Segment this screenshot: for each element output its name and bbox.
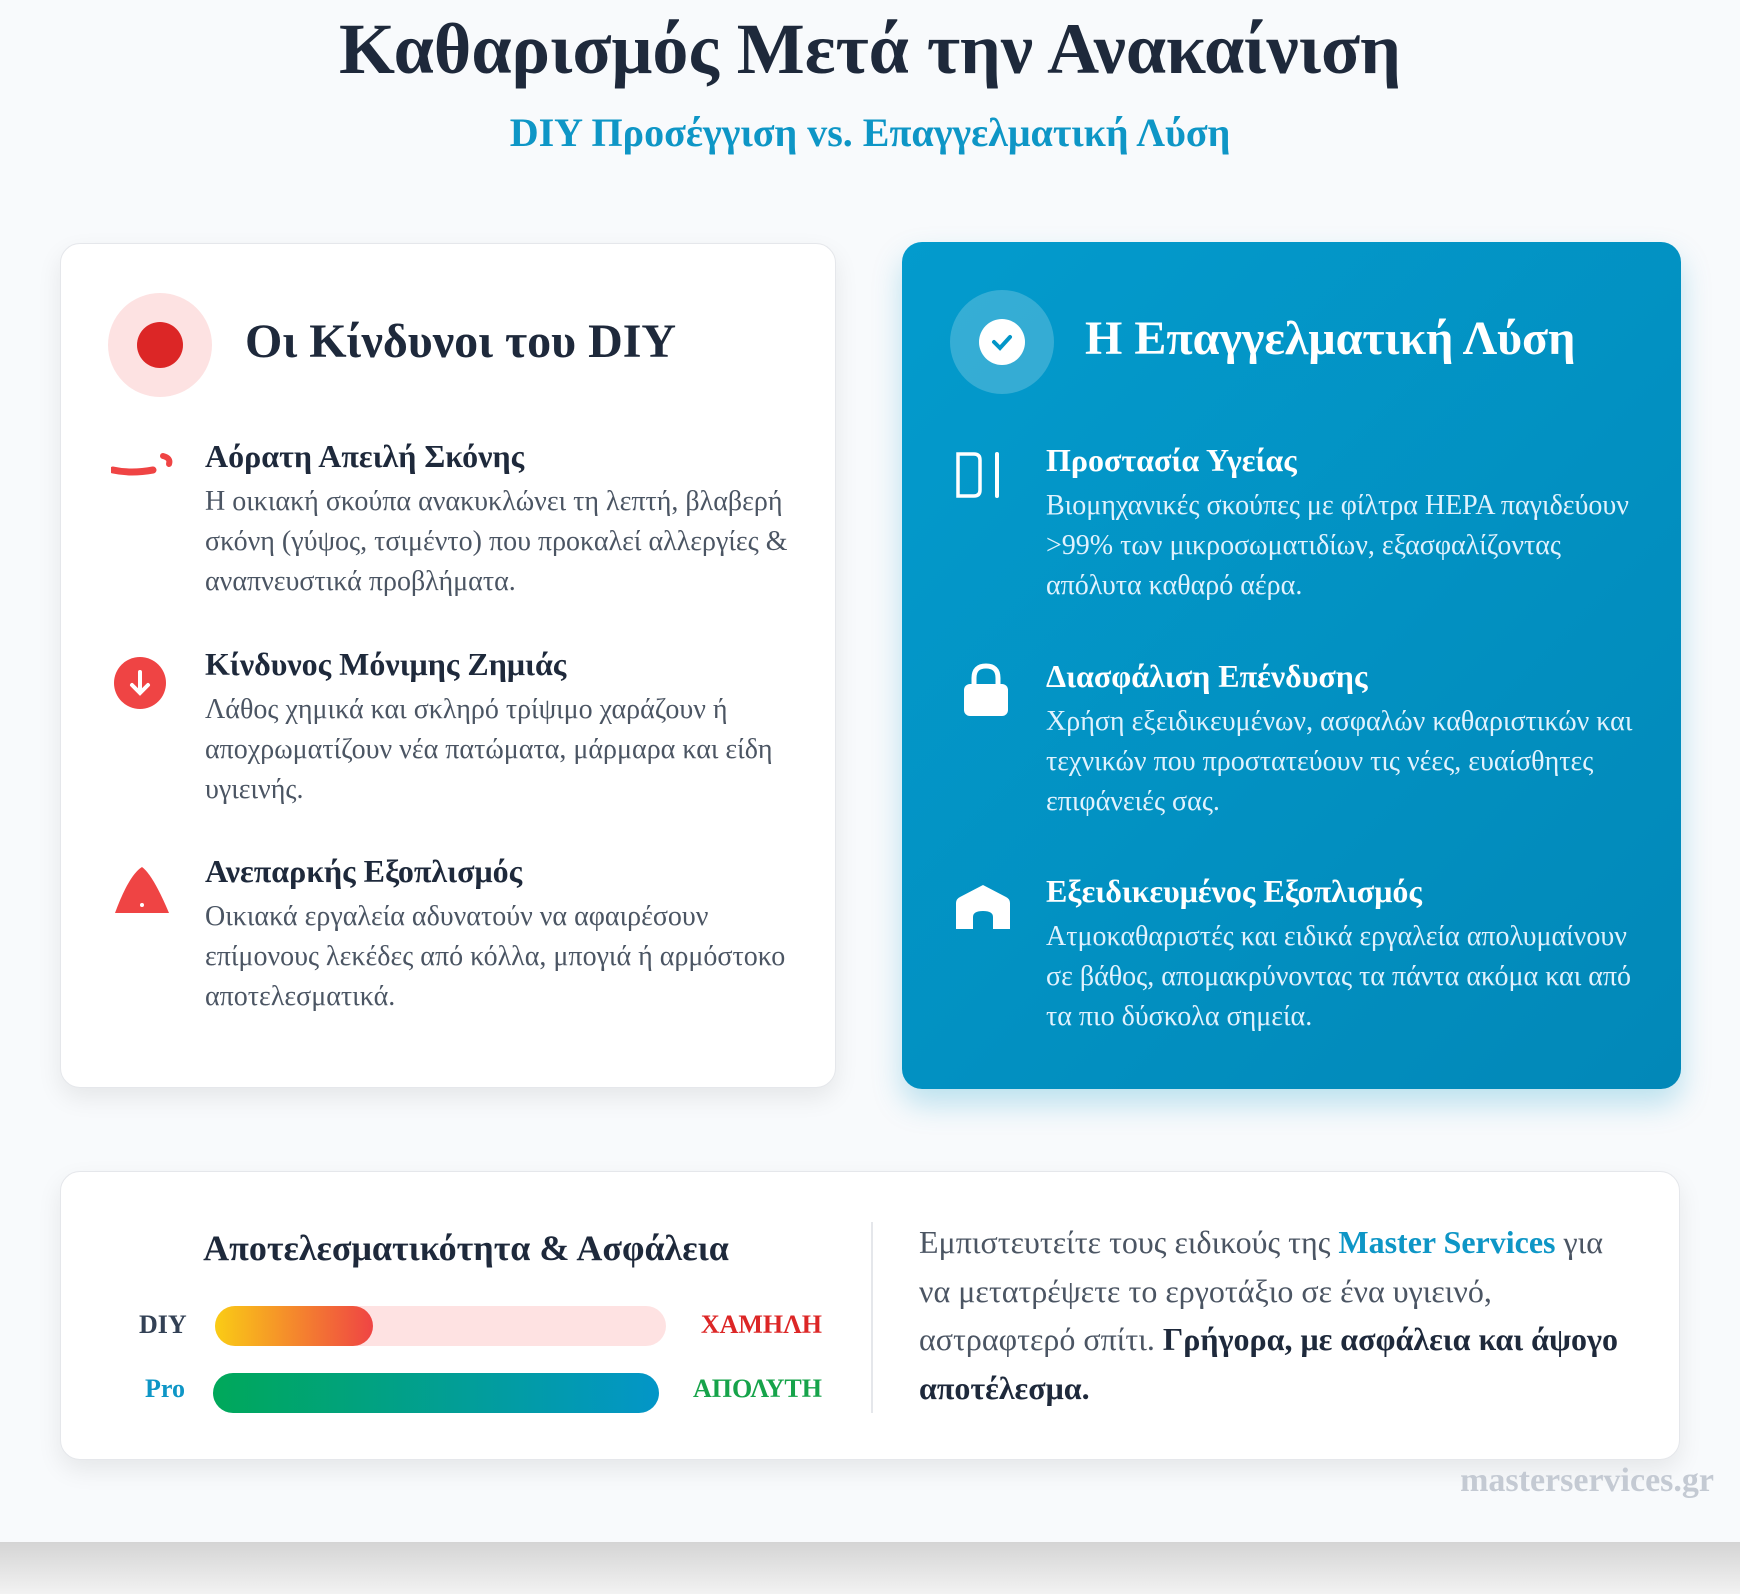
item: equipment	[115, 853, 785, 1012]
panel: DIY risks: Οικιακά εργαλεία αδυνατούν να αφαιρέσουν επίμονους λεκέδες από κόλλα, μπογιά ή αρμόστοκο αποτελεσματικά.	[205, 901, 785, 1012]
watermark: masterservices.gr	[1460, 1462, 1714, 1499]
heading: DIY risks: Οι Κίνδυνοι του DIY	[245, 315, 676, 368]
bar chart	[139, 1306, 822, 1413]
heading: pro solution: Η Επαγγελματική Λύση	[1085, 312, 1575, 365]
subtitle: DIY Προσέγγιση vs. Επαγγελματική Λύση	[510, 110, 1230, 155]
bar chart: DIY	[139, 1310, 187, 1339]
panel: DIY risks: Η οικιακή σκούπα ανακυκλώνει τη λεπτή, βλαβερή σκόνη (γύψος, τσιμέντο) που προκαλεί αλλεργίες & αναπνευστικά προβλήματα.	[205, 486, 788, 597]
icon: red dot circle	[108, 293, 212, 397]
item: damage	[114, 646, 773, 805]
icon: dust	[111, 453, 172, 476]
panel: DIY risks: Λάθος χημικά και σκληρό τρίψιμο χαράζουν ή αποχρωματίζουν νέα πατώματα, μάρμαρα και είδη υγιεινής.	[205, 694, 773, 805]
bar chart: ΧΑΜΗΛΗ	[701, 1310, 822, 1339]
icon: house	[956, 885, 1010, 929]
item: equipment	[956, 873, 1631, 1032]
icon: check circle	[950, 290, 1054, 394]
panel: professional solution: Ατμοκαθαριστές και ειδικά εργαλεία απολυμαίνουν σε βάθος, απομακρύνοντας τα πάντα ακόμα και από τα πιο δύσκολα σημεία.	[1046, 921, 1631, 1032]
title: Καθαρισμός Μετά την Ανακαίνιση	[339, 9, 1401, 89]
panel: professional solution: Χρήση εξειδικευμένων, ασφαλών καθαριστικών και τεχνικών που προστατεύουν τις νέες, ευαίσθητες επιφάνειές σας.	[1046, 706, 1632, 817]
panel: professional solution: Βιομηχανικές σκούπες με φίλτρα HEPA παγιδεύουν >99% των μικροσωματιδίων, εξασφαλίζοντας απόλυτα καθαρό αέρα.	[1046, 490, 1629, 601]
heading: effectiveness: Αποτελεσματικότητα & Ασφάλεια	[203, 1228, 729, 1268]
icon: lock	[964, 664, 1008, 716]
icon: filter	[956, 452, 999, 498]
panel: DIY risks: Κίνδυνος Μόνιμης Ζημιάς	[205, 646, 566, 682]
panel: professional solution: Εξειδικευμένος Εξοπλισμός	[1046, 873, 1422, 909]
bar chart: ΑΠΟΛΥΤΗ	[693, 1374, 822, 1403]
panel: professional solution	[902, 242, 1681, 1089]
item: dust	[111, 438, 788, 597]
panel: DIY risks: Ανεπαρκής Εξοπλισμός	[205, 853, 522, 889]
icon: warning	[115, 867, 169, 913]
panel: professional solution: Προστασία Υγείας	[1046, 442, 1297, 478]
item: investment	[964, 658, 1632, 817]
panel: comparison	[60, 1171, 1680, 1460]
panel: DIY risks	[60, 243, 836, 1088]
bar chart: Pro	[145, 1374, 185, 1403]
text: call to action: Εμπιστευτείτε τους ειδικούς της Master Services για να μετατρέψετε το εργοτάξιο σε ένα υγιεινό, αστραφτερό σπίτι. Γρήγορα, με ασφάλεια και άψογο αποτέλεσμα.	[919, 1224, 1618, 1406]
panel: professional solution: Διασφάλιση Επένδυσης	[1046, 658, 1367, 694]
panel: DIY risks: Αόρατη Απειλή Σκόνης	[205, 438, 524, 474]
item: health	[956, 442, 1629, 601]
icon: down arrow circle	[114, 657, 166, 709]
